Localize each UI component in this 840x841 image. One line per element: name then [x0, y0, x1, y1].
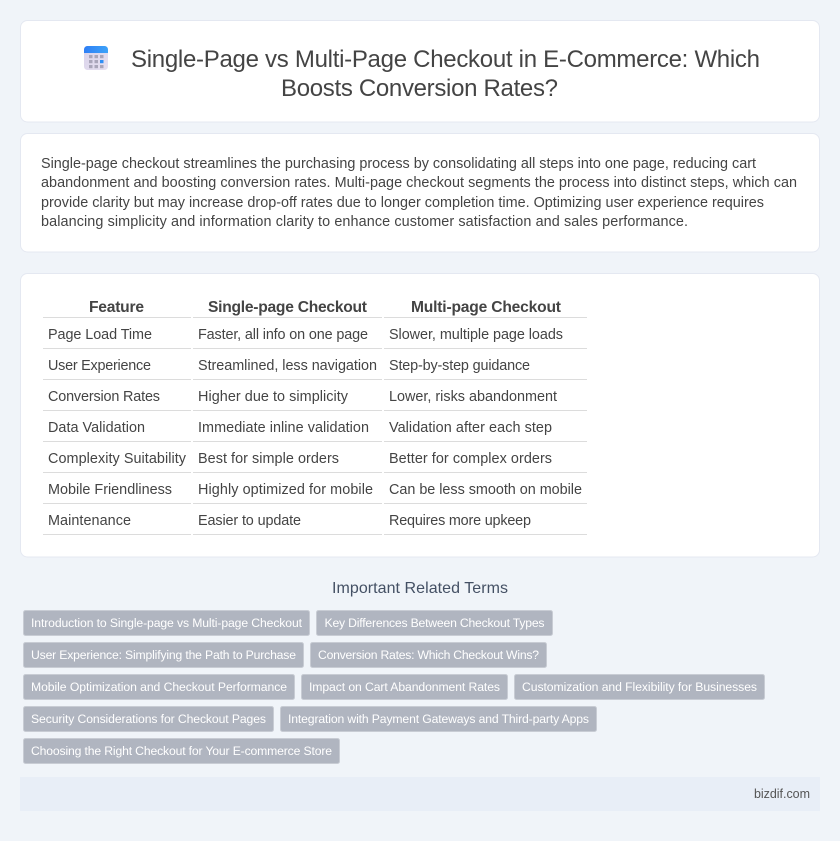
- title: Boosts Conversion Rates?: [281, 75, 558, 102]
- tag: [24, 674, 294, 700]
- tag: Mobile Optimization and Checkout Performance: [31, 680, 287, 694]
- summary paragraph: abandonment and boosting conversion rates. Multi-page checkout segments the process into distinct steps, which can: [41, 175, 797, 191]
- icon: calendar: [84, 46, 108, 70]
- tag: [24, 706, 274, 732]
- row: data validation: Data Validation: [48, 420, 145, 436]
- tag: [24, 642, 304, 668]
- row: mobile friendliness: Mobile Friendliness: [48, 482, 172, 498]
- tag: [302, 674, 508, 700]
- row: maintenance: Requires more upkeep: [389, 513, 531, 529]
- panel: title header: [20, 20, 820, 122]
- row: page load time: [48, 327, 563, 343]
- panel: summary text: [20, 134, 820, 252]
- tag: Security Considerations for Checkout Pages: [31, 712, 266, 726]
- summary paragraph: [41, 156, 797, 230]
- table header: Feature: [89, 299, 144, 316]
- row: conversion rates: [48, 389, 557, 405]
- row: user experience: User Experience: [48, 358, 151, 374]
- panel: related term tags: [24, 610, 764, 764]
- row: user experience: [48, 358, 530, 374]
- panel: comparison table: [20, 274, 820, 557]
- row: conversion rates: Higher due to simplicity: [198, 389, 349, 405]
- heading: related terms: Important Related Terms: [332, 580, 508, 597]
- tag: Conversion Rates: Which Checkout Wins?: [318, 648, 539, 662]
- row: user experience: Step-by-step guidance: [389, 358, 530, 374]
- footer bar: [20, 777, 820, 811]
- row: user experience: Streamlined, less navigation: [198, 358, 377, 374]
- summary paragraph: balancing simplicity and information clarity to enhance customer satisfaction and sales performance.: [41, 214, 688, 230]
- table header: [89, 299, 561, 316]
- row: data validation: [48, 420, 552, 436]
- tag: [24, 738, 340, 764]
- table header: Multi-page Checkout: [411, 299, 561, 316]
- tag: Choosing the Right Checkout for Your E-commerce Store: [31, 744, 332, 758]
- tag: Key Differences Between Checkout Types: [324, 616, 544, 630]
- row: data validation: Validation after each step: [389, 420, 552, 436]
- row: page load time: Slower, multiple page loads: [389, 327, 563, 343]
- row: mobile friendliness: Can be less smooth on mobile: [389, 482, 582, 498]
- row: complexity suitability: [48, 451, 552, 467]
- title: Single-Page vs Multi-Page Checkout in E-Commerce: Which: [131, 46, 760, 73]
- summary paragraph: provide clarity but may increase drop-off rates due to longer completion time. Optimizing user experience requires: [41, 195, 764, 211]
- table header: Single-page Checkout: [208, 299, 367, 316]
- tag: Customization and Flexibility for Businesses: [522, 680, 757, 694]
- footer bar: bizdif.com: [754, 787, 810, 801]
- row: page load time: Page Load Time: [48, 327, 152, 343]
- tag: [310, 642, 546, 668]
- row: maintenance: [48, 513, 531, 529]
- row: mobile friendliness: Highly optimized for mobile: [198, 482, 373, 498]
- row: data validation: Immediate inline validation: [198, 420, 369, 436]
- summary paragraph: Single-page checkout streamlines the purchasing process by consolidating all steps into one page, reducing cart: [41, 156, 756, 172]
- title: [131, 46, 760, 102]
- tag: Introduction to Single-page vs Multi-page Checkout: [31, 616, 303, 630]
- tag: [280, 706, 596, 732]
- tag: Integration with Payment Gateways and Third-party Apps: [288, 712, 589, 726]
- row: mobile friendliness: [48, 482, 582, 498]
- row: conversion rates: Lower, risks abandonment: [389, 389, 557, 405]
- tag: User Experience: Simplifying the Path to Purchase: [31, 648, 296, 662]
- tag: Impact on Cart Abandonment Rates: [309, 680, 500, 694]
- row: complexity suitability: Complexity Suitability: [48, 451, 187, 467]
- row: complexity suitability: Better for complex orders: [389, 451, 552, 467]
- row: page load time: Faster, all info on one page: [198, 327, 368, 343]
- row: maintenance: Maintenance: [48, 513, 131, 529]
- tag: [316, 610, 552, 636]
- row: maintenance: Easier to update: [198, 513, 301, 529]
- tag: [514, 674, 764, 700]
- row: conversion rates: Conversion Rates: [48, 389, 160, 405]
- tag: [24, 610, 310, 636]
- row: complexity suitability: Best for simple orders: [198, 451, 339, 467]
